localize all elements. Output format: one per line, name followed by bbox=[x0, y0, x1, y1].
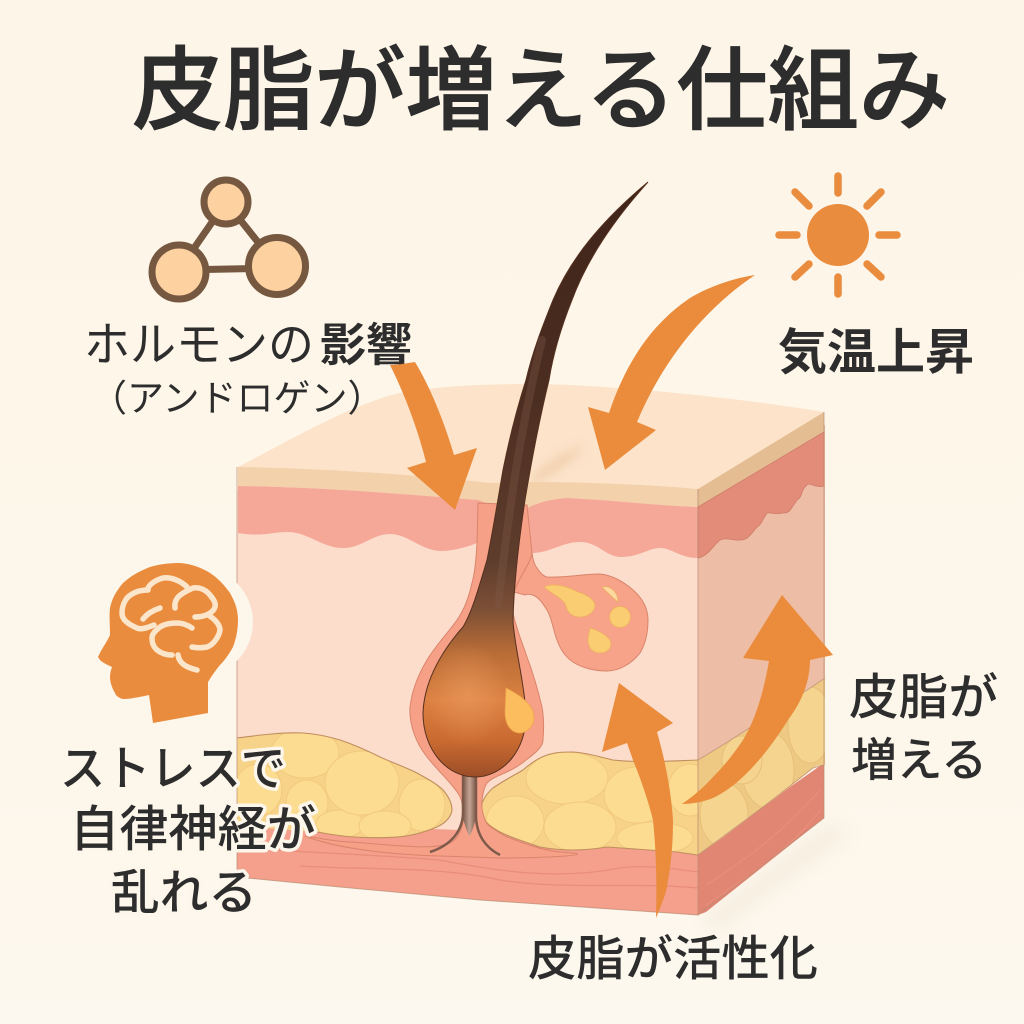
fat layer left bbox=[237, 733, 452, 838]
block edges bbox=[237, 412, 825, 915]
bulb sebum droplet bbox=[505, 688, 534, 733]
label: hormones: ホルモンの bbox=[84, 318, 314, 371]
hair shaft and bulb bbox=[423, 182, 648, 777]
arrow: hormones to skin bbox=[390, 362, 477, 510]
stratum side band bbox=[698, 412, 824, 507]
lower dermis texture bbox=[237, 790, 820, 905]
sebaceous gland bbox=[514, 553, 648, 671]
label: temperature rise: 気温上昇 bbox=[778, 326, 974, 380]
lower dermis front bbox=[237, 822, 698, 915]
arrow: sebum activation bbox=[602, 683, 673, 918]
label: sebum increases: 増える bbox=[851, 734, 987, 786]
hair stem below bulb bbox=[430, 772, 500, 855]
label: sebum increases: 皮脂が bbox=[849, 671, 998, 725]
follicle sheath bbox=[305, 503, 577, 858]
icon halo bbox=[143, 567, 253, 677]
skin top surface bbox=[238, 384, 824, 489]
fat layer left outline bbox=[237, 733, 452, 838]
label: stress: ストレスで bbox=[60, 743, 286, 796]
title: 皮脂が増える仕組み bbox=[132, 41, 950, 142]
dermis front face bbox=[237, 490, 698, 860]
icon: head with brain bbox=[98, 563, 238, 723]
sebum droplets bbox=[544, 585, 630, 653]
surface dimple shading bbox=[530, 445, 585, 484]
arrow: temperature to skin bbox=[588, 275, 755, 470]
arrow: sebum increases bbox=[682, 595, 833, 804]
gland body bbox=[514, 553, 648, 671]
hair shine bbox=[498, 340, 542, 605]
stratum corneum band bbox=[238, 467, 698, 510]
bulb highlight bbox=[426, 643, 510, 747]
label: hormones bbox=[84, 318, 412, 419]
label: hormones: （アンドロゲン） bbox=[90, 378, 385, 419]
label: stress: 自律神経が bbox=[70, 803, 316, 857]
epidermis front bbox=[238, 486, 698, 558]
fat layer right outline bbox=[482, 752, 698, 855]
label: hormones: 影響 bbox=[320, 319, 412, 371]
dermis side face bbox=[698, 425, 825, 770]
label: stress bbox=[60, 743, 316, 920]
block ground shadow bbox=[700, 822, 850, 935]
label: sebum increases bbox=[849, 671, 998, 786]
epidermis side bbox=[698, 432, 824, 558]
label: sebum activation: 皮脂が活性化 bbox=[528, 933, 818, 986]
skin cross-section block bbox=[234, 182, 850, 935]
fat layer right bbox=[482, 752, 698, 854]
lower dermis side bbox=[698, 763, 824, 915]
icon: sun bbox=[779, 176, 897, 294]
icon: hormone molecule bbox=[152, 180, 306, 299]
label: stress: 乱れる bbox=[111, 867, 257, 920]
fat layer side bbox=[698, 675, 832, 860]
